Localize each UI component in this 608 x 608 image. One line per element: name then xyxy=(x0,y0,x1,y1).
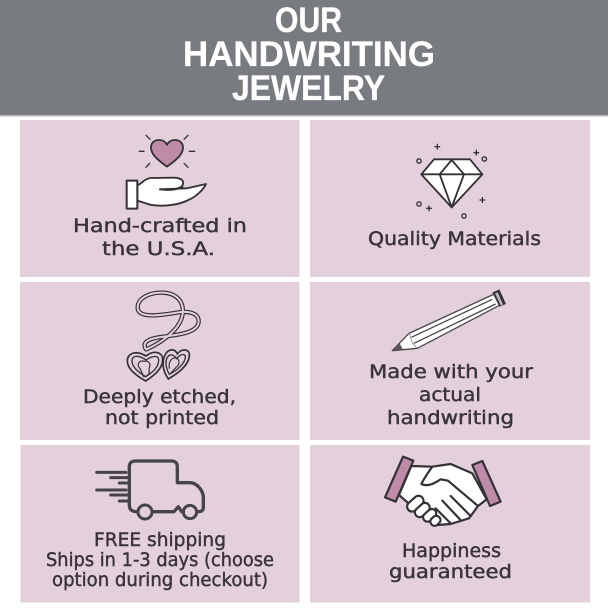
panel: deeply etched xyxy=(20,282,300,440)
panel: happiness guaranteed xyxy=(310,445,590,602)
text: quality materials: Quality Materials xyxy=(368,228,541,250)
icon: diamond xyxy=(417,144,486,218)
text: happiness guaranteed xyxy=(389,540,512,583)
text: free shipping: option during checkout) xyxy=(52,569,268,591)
text: deeply etched: not printed xyxy=(105,407,219,429)
text: hand-crafted xyxy=(73,215,247,260)
text: happiness guaranteed: guaranteed xyxy=(389,561,512,583)
text: happiness guaranteed: Happiness xyxy=(402,540,501,562)
text: free shipping: Ships in 1-3 days (choose xyxy=(46,549,274,571)
header band and title: OUR xyxy=(275,1,342,40)
icon: delivery truck xyxy=(97,461,203,519)
header band and title: JEWELRY xyxy=(232,69,385,108)
panel: handwriting xyxy=(310,282,590,440)
icon: heart over hand xyxy=(127,135,206,209)
text: handwriting: Made with your xyxy=(369,361,533,383)
text: deeply etched: Deeply etched, xyxy=(83,386,236,408)
text: deeply etched xyxy=(83,386,236,429)
icon: pencil xyxy=(392,289,506,351)
text: handwriting: handwriting xyxy=(387,407,514,429)
icon: handshake xyxy=(385,457,501,527)
text: free shipping: FREE shipping xyxy=(94,529,226,551)
text: handwriting xyxy=(369,361,533,429)
text: hand-crafted: the U.S.A. xyxy=(102,238,215,260)
text: handwriting: actual xyxy=(419,384,481,406)
icon: heart locket necklace xyxy=(127,293,199,381)
text: free shipping xyxy=(46,529,274,591)
text: hand-crafted: Hand-crafted in xyxy=(73,215,247,237)
panel: hand-crafted xyxy=(20,120,300,277)
panel: quality materials xyxy=(310,120,590,277)
header band and title xyxy=(0,0,608,116)
panel: free shipping xyxy=(20,445,300,602)
header band and title: HANDWRITING xyxy=(183,35,435,74)
